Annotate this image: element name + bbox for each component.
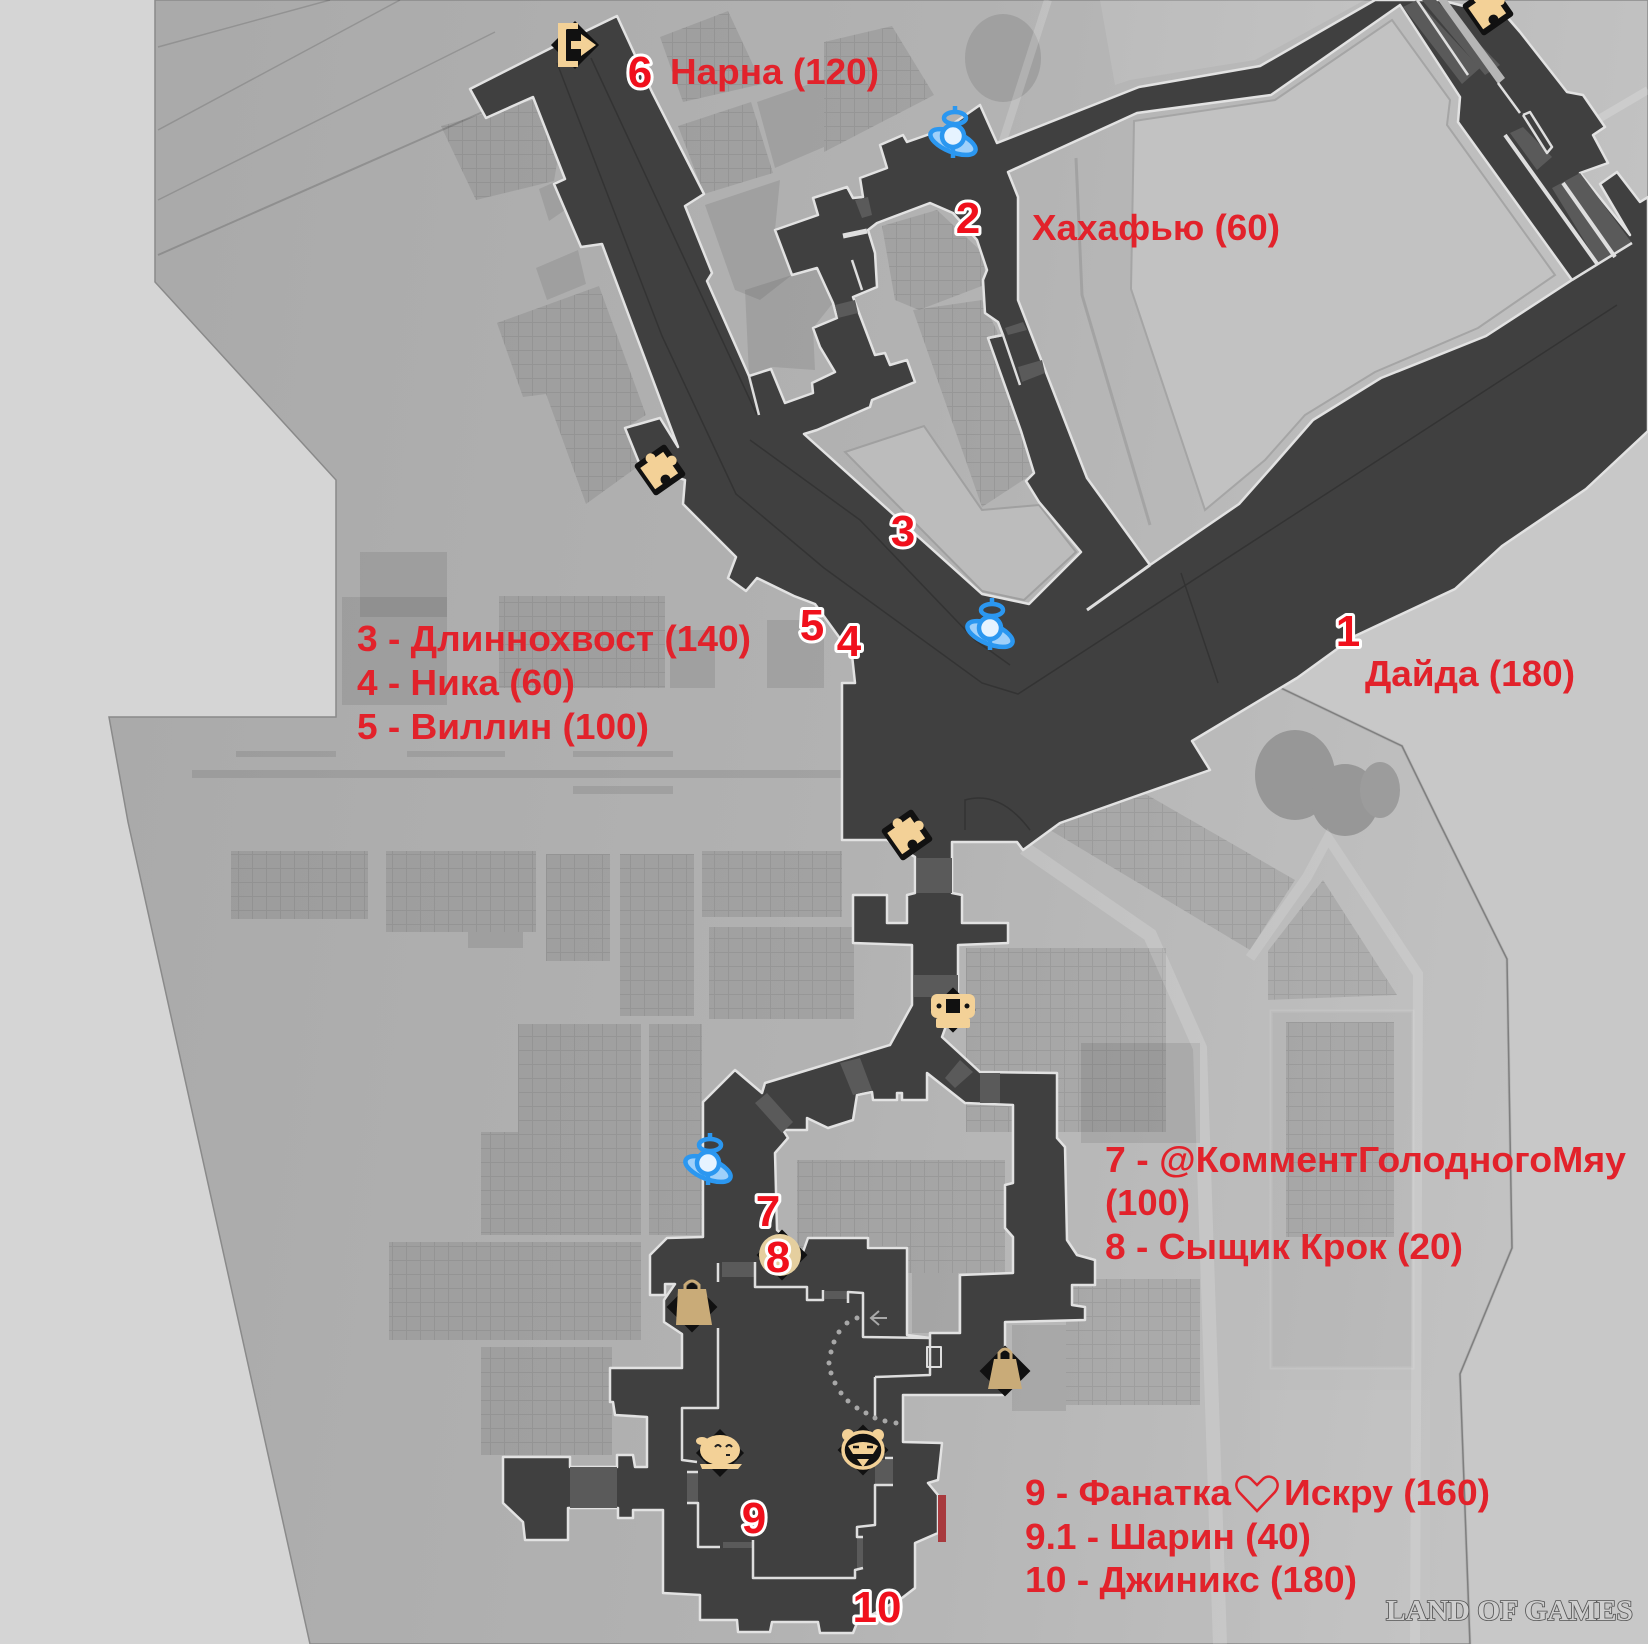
label group: enemies 3 to 5: 4 - Ника (60): [357, 662, 575, 703]
label group: enemies 7 and 8: 8 - Сыщик Крок (20): [1105, 1226, 1463, 1267]
icon: collectible behind marker 8: [757, 1230, 807, 1280]
label group: enemies 7 and 8: [1105, 1139, 1626, 1267]
label group: enemies 9 to 10: Искру (160): [1284, 1472, 1490, 1513]
eastern outer ground: [1281, 431, 1648, 1644]
icon: puzzle piece 2: [880, 807, 934, 861]
label: Hahafyu: Хахафью (60): [1032, 207, 1280, 248]
label: Narna: Нарна (120): [670, 51, 879, 92]
walkable floor plan: [470, 0, 1648, 1633]
label group: enemies 3 to 5: 3 - Длиннохвост (140): [357, 618, 751, 659]
label group: enemies 3 to 5: [357, 618, 751, 747]
marker 1: 1: [1336, 607, 1360, 656]
marker 9: 9: [742, 1494, 766, 1543]
icon: puzzle piece 1: [633, 442, 687, 496]
inner wall lines: [682, 0, 1632, 1578]
icon: raccoon: [838, 1425, 888, 1475]
label: Dayda: Дайда (180): [1365, 653, 1575, 694]
icon: duck character: [696, 1429, 744, 1477]
icon: shopping bag 2: [980, 1346, 1030, 1396]
stairs: [570, 0, 1632, 1568]
label group: enemies 7 and 8: 7 - @КомментГолодногоМяу: [1105, 1139, 1626, 1180]
marker 5: 5: [800, 601, 824, 650]
watermark: LAND OF GAMES: [1386, 1596, 1633, 1627]
icon: console: [930, 987, 976, 1033]
label group: enemies 9 to 10: 9 - Фанатка: [1025, 1472, 1232, 1513]
red door: [938, 1495, 946, 1542]
marker 4: 4: [837, 617, 862, 666]
label group: enemies 9 to 10: [1025, 1472, 1490, 1600]
floor detail lines: [557, 58, 1617, 830]
arrow: route direction: [871, 1311, 887, 1325]
marker 6: 6: [628, 48, 652, 97]
marker 10: 10: [853, 1583, 901, 1632]
water basin: [1131, 20, 1555, 510]
lighter ground north of the road: [1100, 0, 1365, 85]
icon: blue teleport 2: [964, 598, 1016, 652]
icon: shopping bag 1: [667, 1281, 717, 1332]
label group: enemies 3 to 5: 5 - Виллин (100): [357, 706, 649, 747]
marker 8: 8: [766, 1233, 790, 1282]
icon: exit: [551, 21, 599, 69]
background buildings: [192, 11, 1430, 1644]
label group: enemies 9 to 10: 10 - Джиникс (180): [1025, 1559, 1357, 1600]
triangular island courtyard: [845, 426, 1076, 600]
marker 7: 7: [756, 1187, 780, 1236]
icon: puzzle piece 3: [1461, 0, 1515, 36]
label group: enemies 9 to 10: 9.1 - Шарин (40): [1025, 1516, 1311, 1557]
icon: blue teleport 3: [682, 1133, 734, 1187]
dotted route: [826, 1316, 898, 1426]
marker 2: 2: [956, 194, 980, 243]
marker 3: 3: [891, 507, 915, 556]
south courtyard building: [797, 1160, 1005, 1333]
icon: blue teleport 1: [927, 106, 979, 160]
label group: enemies 7 and 8: (100): [1105, 1182, 1190, 1223]
